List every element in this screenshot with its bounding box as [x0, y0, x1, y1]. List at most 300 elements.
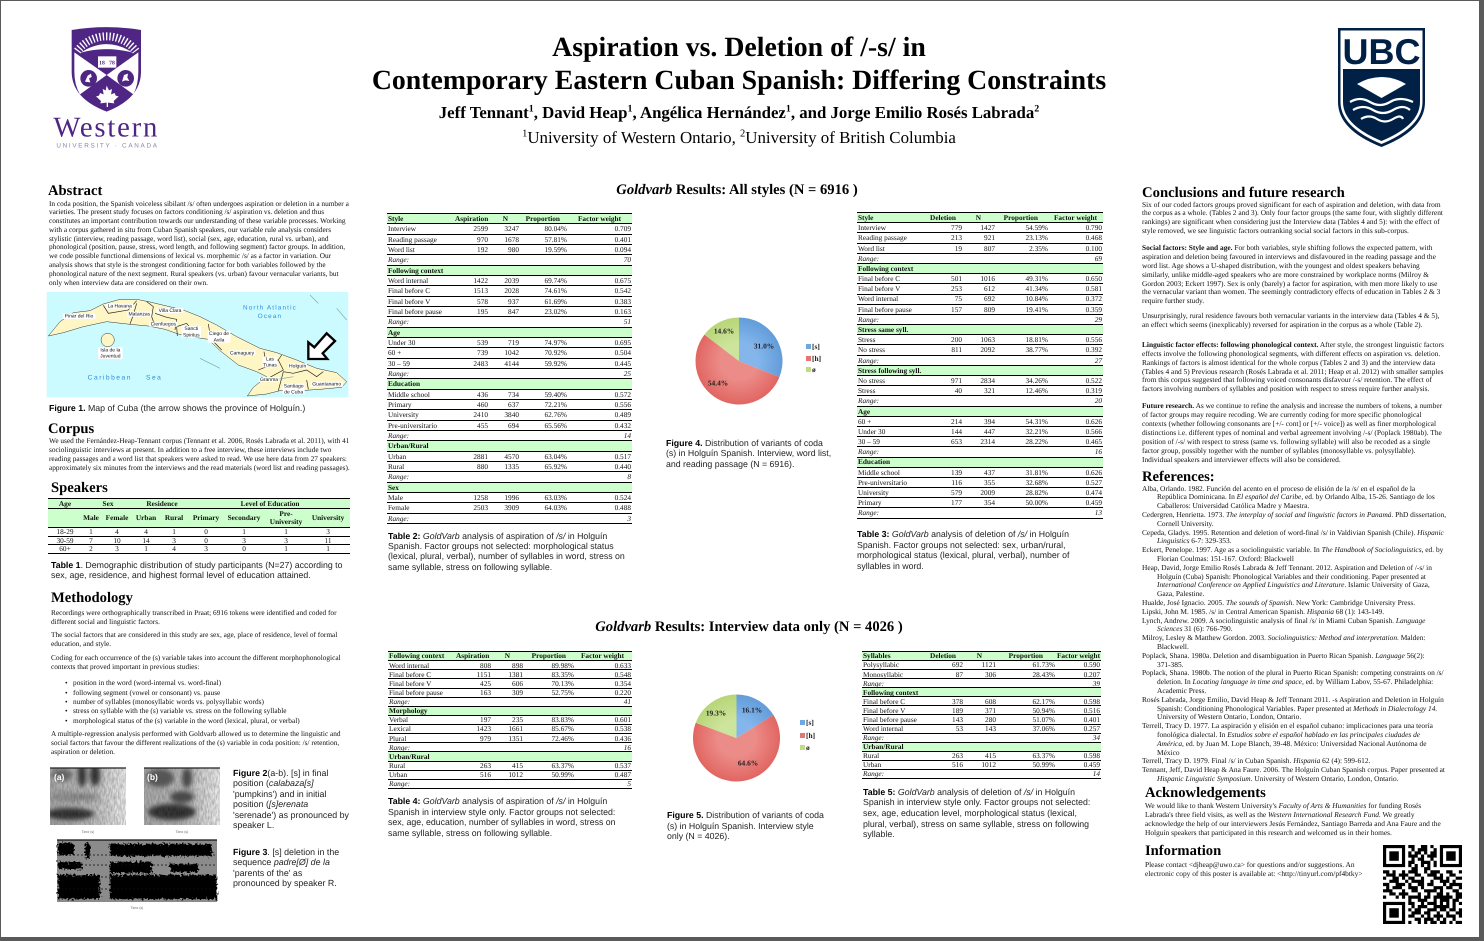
list: coded contexts — [65, 678, 300, 725]
caption: figure 3: pronounced by speaker R. — [233, 878, 337, 888]
caption: figure 5: (s) in Holguín Spanish. Interview style — [667, 820, 814, 830]
table 3: deletion all styles: 0.359 — [1086, 305, 1102, 314]
table 3: deletion all styles: 29 — [1095, 315, 1102, 324]
table 5: deletion interview: 87 — [956, 670, 963, 678]
text: corpus: We used the Fernández-Heap-Tennant corpus (Tennant et al. 2006, Rosés Labrada et al. 2011), with 41 — [49, 436, 349, 445]
table 2: aspiration all styles: 72.21% — [544, 400, 567, 409]
list: coded contexts: • position in the word (word-internal vs. word-final) — [65, 678, 221, 687]
figure 2: spectrograms: (b) — [147, 772, 158, 782]
text: references: Gaza, Palestine. — [1157, 589, 1204, 598]
table 1: speakers: 0 — [204, 527, 208, 536]
table 2: aspiration all styles: 980 — [508, 245, 519, 254]
table 1: speakers: Urban — [136, 513, 156, 522]
text: social factors conclusions: the vernacular variant than women. The seemingly contradictory effects of education in Tables 2 & 3 — [1142, 287, 1440, 296]
heading: Abstract: Abstract — [48, 183, 102, 199]
table 2: aspiration all styles: Final before V — [388, 297, 430, 306]
table 3: deletion all styles: 214 — [951, 417, 962, 426]
text: conclusions intro: style removed, we see linguistic factors outranking social social factors in this sub-corpus. — [1142, 226, 1409, 235]
table 2: aspiration all styles: 1513 — [473, 286, 488, 295]
table 3: deletion all styles: 1016 — [980, 274, 995, 283]
text: social factors conclusions: Social factors: Style and age. For both variables, style shifting follows the expected pattern, with — [1142, 243, 1432, 252]
table 4: aspiration interview: 16 — [624, 743, 631, 752]
table 3: deletion all styles: 116 — [951, 478, 962, 487]
table 5: deletion interview: 143 — [985, 724, 996, 733]
text: social factors conclusions: Gordon 2003; Eckert 1997). Sex is only (barely) a factor for aspiration, with men more likely to use — [1142, 279, 1437, 288]
table 3: deletion all styles: 354 — [984, 498, 995, 507]
text: social factors: The social factors that are considered in this study are sex, age, place of residence, level of formal — [51, 630, 337, 639]
text: acknowledgements: acknowledge the help of our interviewers Jesús Fernández, Santiago Barreda and Ana Faure and the — [1145, 819, 1441, 828]
table 1: speakers: 0 — [242, 544, 246, 553]
table 2: aspiration all styles: 0.432 — [615, 421, 631, 430]
text: references: Linguistics 6-7: 329-353. — [1157, 536, 1232, 545]
caption: figure 2: position (calabaza[s] — [233, 778, 314, 788]
table 3: deletion all styles: 0.474 — [1086, 488, 1102, 497]
table 4: aspiration interview: 41 — [624, 697, 631, 706]
table 3: deletion all styles: 0.465 — [1086, 437, 1102, 446]
table 2: aspiration all styles: Final before pause — [388, 307, 442, 316]
table 4: aspiration interview: 1151 — [477, 670, 491, 679]
figure: map of Cuba: Santiago — [284, 383, 304, 389]
caption: figure 2: 'serenade') as pronounced by — [233, 810, 349, 820]
table 4: aspiration interview: 0.538 — [615, 724, 631, 733]
table 2: aspiration all styles: 57.81% — [544, 235, 567, 244]
table 5: deletion interview: Final before C — [863, 697, 905, 706]
text: future research: Individual speakers and interviewer effects will also be considered. — [1142, 455, 1341, 464]
text: information: Please contact <djheap@uwo.ca> for questions and/or suggestions. An — [1145, 860, 1355, 869]
table 2: aspiration all styles: 719 — [508, 338, 519, 347]
text: references: Heap, David, Jorge Emilio Rosés Labrada & Jeff Tennant. 2012. Aspiration and Deletion of /-s/ in — [1142, 563, 1432, 572]
table 2: aspiration all styles: 3840 — [504, 410, 519, 419]
text: abstract: only when interview data are considered on their own. — [49, 278, 208, 287]
table 4: aspiration interview: 85.67% — [552, 724, 574, 733]
table 3: deletion all styles: 1427 — [980, 223, 995, 232]
caption: table 1 — [51, 560, 342, 580]
table 5: deletion interview: 0.598 — [1084, 751, 1100, 760]
table 2: aspiration all styles: 63.03% — [544, 493, 567, 502]
table 4: aspiration interview: 1012 — [508, 770, 523, 779]
figure: map of Cuba: Isla de la — [100, 347, 121, 353]
caption: table 5: sex, age, education level, morphological status (lexical, — [863, 808, 1077, 818]
table 3: deletion all styles: 692 — [984, 294, 995, 303]
heading: references: References: — [1142, 469, 1215, 485]
text: references: 371-385. — [1157, 660, 1183, 669]
table 5: deletion interview: Factor weight — [1057, 651, 1100, 660]
figure: map of Cuba: Pinar del Rio — [65, 313, 93, 319]
table 2: aspiration all styles: 2483 — [473, 359, 488, 368]
table 2: aspiration all styles: 0.489 — [615, 410, 631, 419]
table 3: deletion all styles: 2.35% — [1029, 244, 1048, 252]
table 1: speakers: Sex — [103, 499, 113, 508]
table 2: aspiration all styles: 3247 — [504, 224, 519, 233]
text: references: Blackwell. — [1157, 642, 1189, 651]
table 4: aspiration interview: 5 — [627, 779, 631, 788]
text: future research: factor group, possibly together with the number of syllables (monosyllable vs. polysyllable). — [1142, 446, 1415, 455]
table 3: deletion all styles: Word internal — [858, 294, 898, 303]
text: coding — [51, 653, 341, 671]
table 4: aspiration interview: Final before V — [389, 679, 431, 688]
table 2: aspiration all styles: 0.517 — [615, 452, 631, 461]
table 2: aspiration all styles: 60 + — [388, 348, 401, 357]
caption: figure 2: speaker L. — [233, 820, 274, 830]
text: abstract: In coda position, the Spanish voiceless sibilant /s/ often undergoes aspiration or deletion in a number a — [49, 198, 349, 208]
table 3: deletion all styles: 157 — [951, 305, 962, 314]
table 2: aspiration all styles: 880 — [477, 462, 488, 471]
pie chart: figure 5: [h] — [806, 731, 815, 740]
table 2: aspiration all styles: Interview — [388, 224, 416, 233]
table 5: deletion interview: 53 — [956, 724, 963, 733]
text: social factors — [51, 630, 338, 648]
table 2: aspiration all styles: 0.695 — [615, 338, 631, 347]
text: social factors: education, and style. — [51, 639, 111, 648]
table 2: aspiration all styles: 74.97% — [544, 338, 567, 347]
table 1: speakers: 11 — [325, 536, 332, 545]
table 2: aspiration all styles: 80.04% — [544, 224, 567, 233]
text: references: Sciences 31 (6): 766-790. — [1157, 624, 1233, 633]
table 1: speakers: 3 — [242, 536, 246, 545]
figure: map of Cuba: Sancti — [184, 326, 198, 331]
title — [372, 32, 1106, 96]
table 2: aspiration all styles: 0.524 — [615, 493, 631, 502]
text: social factors conclusions: word list. Age shows a U-shaped distribution, with the youngest and oldest speakers behaving — [1142, 261, 1420, 270]
table 1: speakers: 3 — [284, 536, 288, 545]
table 3: deletion all styles: 38.77% — [1026, 345, 1048, 354]
table 2: aspiration all styles: 734 — [508, 390, 519, 399]
table 1: speakers: 7 — [89, 536, 93, 545]
table 1: speakers: 3 — [204, 544, 208, 553]
figure: map of Cuba: North Atlantic — [243, 304, 297, 311]
list: coded contexts: • number of syllables (monosyllabic words vs. polysyllabic words) — [65, 697, 264, 706]
table 3: deletion all styles: Final before C — [858, 274, 900, 283]
table 3: deletion all styles: 437 — [984, 468, 995, 477]
table 2: aspiration all styles: 14 — [624, 431, 631, 440]
text: future research — [1142, 401, 1442, 464]
table 5: deletion interview: 0.459 — [1084, 760, 1100, 769]
figure: map of Cuba — [46, 292, 348, 398]
table 3: deletion all styles: Education — [858, 457, 890, 466]
caption: figure 1: Figure 1. Map of Cuba (the arrow shows the province of Holguín.) — [49, 402, 305, 412]
table 5: deletion interview: 1121 — [982, 660, 996, 669]
table 1: speakers: 30-59 — [56, 536, 74, 545]
table 2: aspiration all styles: 0.556 — [615, 400, 631, 409]
table 4: aspiration interview: Following context — [389, 651, 444, 660]
table 1: speakers: Female — [106, 513, 128, 522]
table 5: deletion interview: 63.37% — [1032, 751, 1055, 760]
figure: map of Cuba: Guantanamo — [312, 381, 341, 387]
table 2: aspiration all styles: 539 — [477, 338, 488, 347]
table 1: speakers: 4 — [172, 544, 176, 553]
table 5: deletion interview: Deletion — [930, 651, 956, 660]
table 3: deletion all styles: 253 — [951, 284, 962, 293]
figure 2: spectrograms: Time (s) — [82, 830, 94, 834]
table 3: deletion all styles: N — [976, 213, 981, 222]
table 2: aspiration all styles: 1422 — [473, 276, 488, 285]
caption: figure 4: (s) in Holguín Spanish. Interview, word list, — [666, 448, 831, 458]
table 2: aspiration all styles: 739 — [477, 348, 488, 357]
text: references: Holguín (Cuba) Spanish: Phonological Variables and their conditioning. Paper presented at — [1157, 572, 1426, 581]
pie chart: figure 5: ø — [806, 743, 810, 752]
table 1: speakers: 4 — [115, 527, 119, 536]
text: acknowledgements — [1145, 801, 1441, 837]
table 3: deletion all styles: 355 — [984, 478, 995, 487]
pie chart: figure 5: 19.3% — [706, 708, 726, 718]
table 2: aspiration all styles: Reading passage — [388, 235, 437, 244]
table 3: deletion all styles: 612 — [984, 284, 995, 293]
table 2: aspiration all styles: 4144 — [504, 359, 519, 368]
table 3: deletion all styles: 653 — [951, 437, 962, 446]
text: references: Lipski, John M. 1985. /s/ in Central American Spanish. Hispania 68 (1): 143-149. — [1142, 607, 1384, 616]
table 3: deletion all styles: 32.21% — [1026, 427, 1048, 436]
table 3: deletion all styles: 0.527 — [1086, 478, 1102, 487]
table 2: aspiration all styles: 25 — [624, 369, 631, 378]
text: abstract — [49, 198, 349, 287]
table 2: aspiration all styles: Following context — [388, 266, 443, 275]
logo: Western University: 18 — [99, 60, 105, 66]
table 5: deletion interview: 0.207 — [1084, 670, 1100, 678]
text: references: Caballeros: Universidad Católica Madre y Maestra. — [1157, 501, 1309, 510]
table 2: aspiration all styles: 19.59% — [544, 245, 567, 254]
figure: map of Cuba: Ocean — [258, 313, 282, 320]
caption: table 4 — [388, 796, 616, 838]
table 2: aspiration all styles: 23.02% — [544, 307, 567, 316]
table 4: aspiration interview: 898 — [512, 661, 523, 670]
table 3: deletion all styles: 10.84% — [1026, 294, 1048, 303]
heading: conclusions: Conclusions and future research — [1142, 185, 1345, 201]
table 2: aspiration all styles: 460 — [477, 400, 488, 409]
table 3: deletion all styles: 75 — [955, 294, 962, 303]
table 2: aspiration all styles: Range: — [388, 514, 409, 523]
table 4: aspiration interview: Lexical — [389, 724, 411, 733]
text: references: Cornell University. — [1157, 519, 1214, 528]
table 4: aspiration interview: 808 — [480, 661, 491, 670]
text: abstract: varieties. The present study focuses on factors conditioning /s/ aspiration vs. deletion and thus — [49, 207, 324, 216]
table 3: deletion all styles: Deletion — [930, 213, 956, 222]
table 4: aspiration interview: 52.75% — [552, 688, 574, 697]
table 2: aspiration all styles: 74.61% — [544, 286, 567, 295]
text: abstract: phonological (position, pause, stress, word length, and following segment) factor groups. In addition, — [49, 242, 345, 251]
logo: UBC — [1338, 28, 1425, 147]
table 3: deletion all styles: 0.626 — [1086, 468, 1102, 477]
caption: figure 5: only (N = 4026). — [667, 831, 730, 841]
table 2: aspiration all styles: Factor weight — [578, 214, 621, 223]
table 3: deletion all styles: 2314 — [980, 437, 995, 446]
table 2: aspiration all styles: 65.56% — [544, 421, 567, 430]
figure: map of Cuba: Las — [266, 356, 274, 362]
table 3: deletion all styles: 27 — [1095, 356, 1102, 365]
caption: table 3 — [857, 529, 1070, 571]
table 3: deletion all styles: Stress — [858, 386, 875, 395]
table 3: deletion all styles: Range: — [858, 356, 879, 365]
text: corpus — [49, 436, 350, 472]
table 4: aspiration interview: 197 — [480, 715, 491, 724]
table 4: aspiration interview: 606 — [512, 679, 523, 688]
pie chart: figure 5: 16.1% — [742, 706, 762, 714]
table 3: deletion all styles: 971 — [951, 376, 962, 385]
table 3: deletion all styles: 19.41% — [1026, 305, 1048, 314]
table 2: aspiration all styles: 0.094 — [615, 245, 631, 254]
caption: figure 2 — [233, 768, 349, 830]
text: references: Cepeda, Gladys. 1995. Retention and deletion of word-final /s/ in Valdivian Spanish (Chile). Hispanic — [1142, 528, 1444, 537]
caption: figure 2: Figure 2(a-b). [s] in final — [233, 768, 328, 778]
table 3: deletion all styles: No stress — [858, 376, 885, 385]
table 2: aspiration all styles: 0.572 — [615, 390, 631, 399]
text: references: Spanish: Conditioning Phonological Variables. Paper presented at Methods in Dialectology 14. — [1157, 704, 1437, 713]
table 4: aspiration interview: 0.436 — [615, 734, 631, 743]
text: corpus: sociolinguistic interviews at present. In addition to a free interview, these interviews include two — [49, 445, 331, 454]
table 5: deletion interview: 50.99% — [1032, 760, 1055, 769]
table 2: aspiration all styles: 694 — [508, 421, 519, 430]
text: coding: Coding for each occurrence of the (s) variable takes into account the different morphophonological — [51, 653, 341, 662]
table 1: speakers: 3 — [326, 527, 330, 536]
table 4: aspiration interview: 516 — [480, 770, 491, 779]
table 2: aspiration all styles: 4570 — [504, 452, 519, 461]
text: linguistic factors: from this corpus suggested that following voiced consonants disfavour /-s/ retention. The effect of — [1142, 375, 1432, 384]
table 3: deletion all styles: Word list — [858, 244, 885, 252]
table 1: speakers: Level of Education — [241, 499, 299, 508]
caption: figure 5 — [667, 810, 824, 841]
logo: Western University: 78 — [109, 60, 115, 66]
table 4: aspiration interview: 309 — [512, 688, 523, 697]
text: conclusions intro: the corpus as a whole. (Tables 2 and 3). Only four factor groups (the same four, with slightly different — [1142, 208, 1443, 217]
table 3: deletion all styles: 0.566 — [1086, 427, 1102, 436]
table 2: aspiration all styles: 0.504 — [615, 348, 631, 357]
table 3: deletion all styles: 18.81% — [1026, 335, 1048, 344]
logo: Western University: UNIVERSITY · CANADA — [56, 142, 157, 149]
text: acknowledgements: Labrada's three field visits, as well as the Western International Research Fund. We greatly — [1145, 810, 1415, 819]
table 2: aspiration all styles: 65.92% — [544, 462, 567, 471]
table 3: deletion all styles: 144 — [951, 427, 962, 436]
table 5: deletion interview: Urban — [863, 760, 881, 769]
table 1: speakers — [48, 498, 350, 554]
table 4: aspiration interview: Final before pause — [389, 688, 443, 697]
table 2: aspiration all styles: Style — [388, 214, 403, 223]
table 5: deletion interview: 371 — [985, 706, 996, 715]
table 4: aspiration interview: 1351 — [508, 734, 523, 743]
text: future research: distinctions i.e. different types of nominal and verbal agreement involving /-s/ (Poplack 1980ab). The — [1142, 428, 1442, 437]
table 3: deletion all styles: 0.392 — [1086, 345, 1102, 354]
table 1: speakers: 1 — [284, 544, 288, 553]
table 2: aspiration all styles: 0.440 — [615, 462, 631, 471]
table 3: deletion all styles: 1063 — [980, 335, 995, 344]
table 3: deletion all styles: 12.46% — [1026, 386, 1048, 395]
figure: map of Cuba: Camaguey — [230, 350, 254, 356]
caption: table 4: sex, age, education, number of syllables in word, stress on — [388, 817, 616, 827]
table 5: deletion interview: 0.598 — [1084, 697, 1100, 706]
table 3: deletion all styles: Age — [858, 406, 870, 416]
caption: table 5: plural, verbal), stress on same syllable, stress on following — [863, 819, 1089, 829]
table 2: aspiration all styles: 0.709 — [615, 224, 631, 233]
table 4: aspiration interview: 70.13% — [552, 679, 574, 688]
table 3: deletion all styles: Reading passage — [858, 233, 907, 242]
pie chart: figure 4: 31.0% — [754, 342, 774, 350]
table 5: deletion interview: 415 — [985, 751, 996, 760]
table 3: deletion all styles: Range: — [858, 315, 879, 324]
table 2: aspiration all styles: 436 — [477, 390, 488, 399]
table 1: speakers: Age — [59, 499, 71, 508]
table 2: aspiration all styles: 2410 — [473, 410, 488, 419]
table 3: deletion all styles: 0.790 — [1086, 223, 1102, 232]
text: references: Eckert, Penelope. 1997. Age as a sociolinguistic variable. In The Handbook of Sociolinguistics, ed. by — [1142, 545, 1443, 554]
table 5: deletion interview: 50.94% — [1032, 706, 1055, 715]
table 3: deletion all styles: 16 — [1095, 447, 1102, 456]
table 4: aspiration interview: 1423 — [476, 724, 491, 733]
table 3: deletion all styles: 54.59% — [1026, 223, 1048, 232]
table 3: deletion all styles: 20 — [1095, 396, 1102, 405]
table 2: aspiration all styles: 2028 — [504, 286, 519, 295]
table 4: aspiration interview: 979 — [480, 734, 491, 743]
table 5: deletion interview: Polysyllabic — [863, 660, 899, 669]
table 5: deletion interview: 608 — [985, 697, 996, 706]
table 4: aspiration interview: 415 — [512, 761, 523, 770]
table 3: deletion all styles: Primary — [858, 498, 882, 507]
table 1: speakers: 1 — [144, 544, 148, 553]
figure 2: spectrograms: (a) — [54, 772, 65, 782]
table 5: deletion interview: 0.590 — [1084, 660, 1100, 669]
text: references: Florian Coulmas: 151-167. Oxford: Blackwell — [1157, 554, 1294, 563]
text: social factors conclusions: require further study. — [1142, 296, 1204, 305]
table 5: deletion interview: 0.401 — [1084, 715, 1100, 724]
table 3: deletion all styles: 28.22% — [1026, 437, 1048, 446]
table 2: aspiration all styles: 937 — [508, 297, 519, 306]
figure: map of Cuba: Holguín — [289, 363, 306, 369]
caption: table 5 — [863, 786, 1090, 839]
table 5: deletion interview: 0.516 — [1084, 706, 1100, 715]
text: references: deletion. In Locating language in time and space, ed. by William Labov, 55-67. Philadelphia: — [1157, 677, 1433, 686]
table 3: deletion all styles: 213 — [951, 233, 962, 242]
heading: acknowledgements: Acknowledgements — [1145, 785, 1266, 801]
table 5: deletion interview: 692 — [952, 660, 963, 669]
text: references: Rosés Labrada, Jorge Emilio, David Heap & Jeff Tennant 2011. -s Aspiration and Deletion in Holguín — [1142, 695, 1444, 704]
table 2: aspiration all styles: Urban — [388, 452, 406, 461]
affiliations: 1University of Western Ontario, 2University of British Columbia — [522, 128, 956, 147]
table 4: aspiration interview: Morphology — [389, 706, 428, 715]
table 2: aspiration all styles: 0.383 — [615, 297, 631, 306]
table 3: deletion all styles: 2092 — [980, 345, 995, 354]
table 3: deletion all styles: Range: — [858, 254, 879, 263]
table 3: deletion all styles: 0.581 — [1086, 284, 1102, 293]
figure: map of Cuba: Spiritus — [183, 332, 200, 338]
text: linguistic factors — [1142, 340, 1444, 393]
table 3: deletion all styles: 807 — [984, 244, 995, 252]
text: future research: contexts (whether following consonants are [+/- cont] or [+/- voice]) as well as finer morphological — [1142, 419, 1436, 428]
table 2: aspiration all styles: 637 — [508, 400, 519, 409]
caption: table 3: syllables in word. — [857, 561, 924, 571]
figure: map of Cuba: Caribbean — [88, 374, 132, 381]
figure 2: spectrograms: Time (s) — [176, 830, 188, 834]
table 1: speakers: 3 — [172, 536, 176, 545]
text: references: Milroy, Lesley & Matthew Gordon. 2003. Sociolinguistics: Method and interpretation. Malden: — [1142, 633, 1425, 642]
table 5: deletion interview: Proportion — [1009, 651, 1043, 660]
table 2: aspiration all styles: 1258 — [473, 493, 488, 502]
table 2: aspiration all styles: 1042 — [504, 348, 519, 357]
text: references: Lynch, Andrew. 2009. A sociolinguistic analysis of final /s/ in Miami Cuban Spanish. Language — [1142, 616, 1425, 625]
table 4: aspiration interview: N — [505, 651, 510, 660]
table 2: aspiration all styles: 0.163 — [615, 307, 631, 316]
text: future research: Future research. As we continue to refine the analysis and increase the numbers of tokens, a number — [1142, 401, 1442, 410]
table 1: speakers: 0 — [204, 536, 208, 545]
table 2: aspiration all styles: University — [388, 410, 419, 419]
table 3: deletion all styles: Interview — [858, 223, 886, 232]
table 3: deletion all styles: Under 30 — [858, 427, 885, 436]
table 3: deletion all styles: Factor weight — [1054, 213, 1097, 222]
table 3: deletion all styles: 49.31% — [1026, 274, 1048, 283]
table 3: deletion all styles: 40 — [955, 386, 962, 395]
text: rural residence — [1142, 311, 1439, 329]
table 2: aspiration all styles: N — [503, 214, 508, 223]
table 3: deletion all styles: Stress following syll. — [858, 366, 921, 375]
table 2: aspiration all styles: 3909 — [504, 503, 519, 512]
figure: map of Cuba: Tunas — [263, 362, 277, 368]
table 1: speakers: Secondary — [228, 513, 260, 522]
